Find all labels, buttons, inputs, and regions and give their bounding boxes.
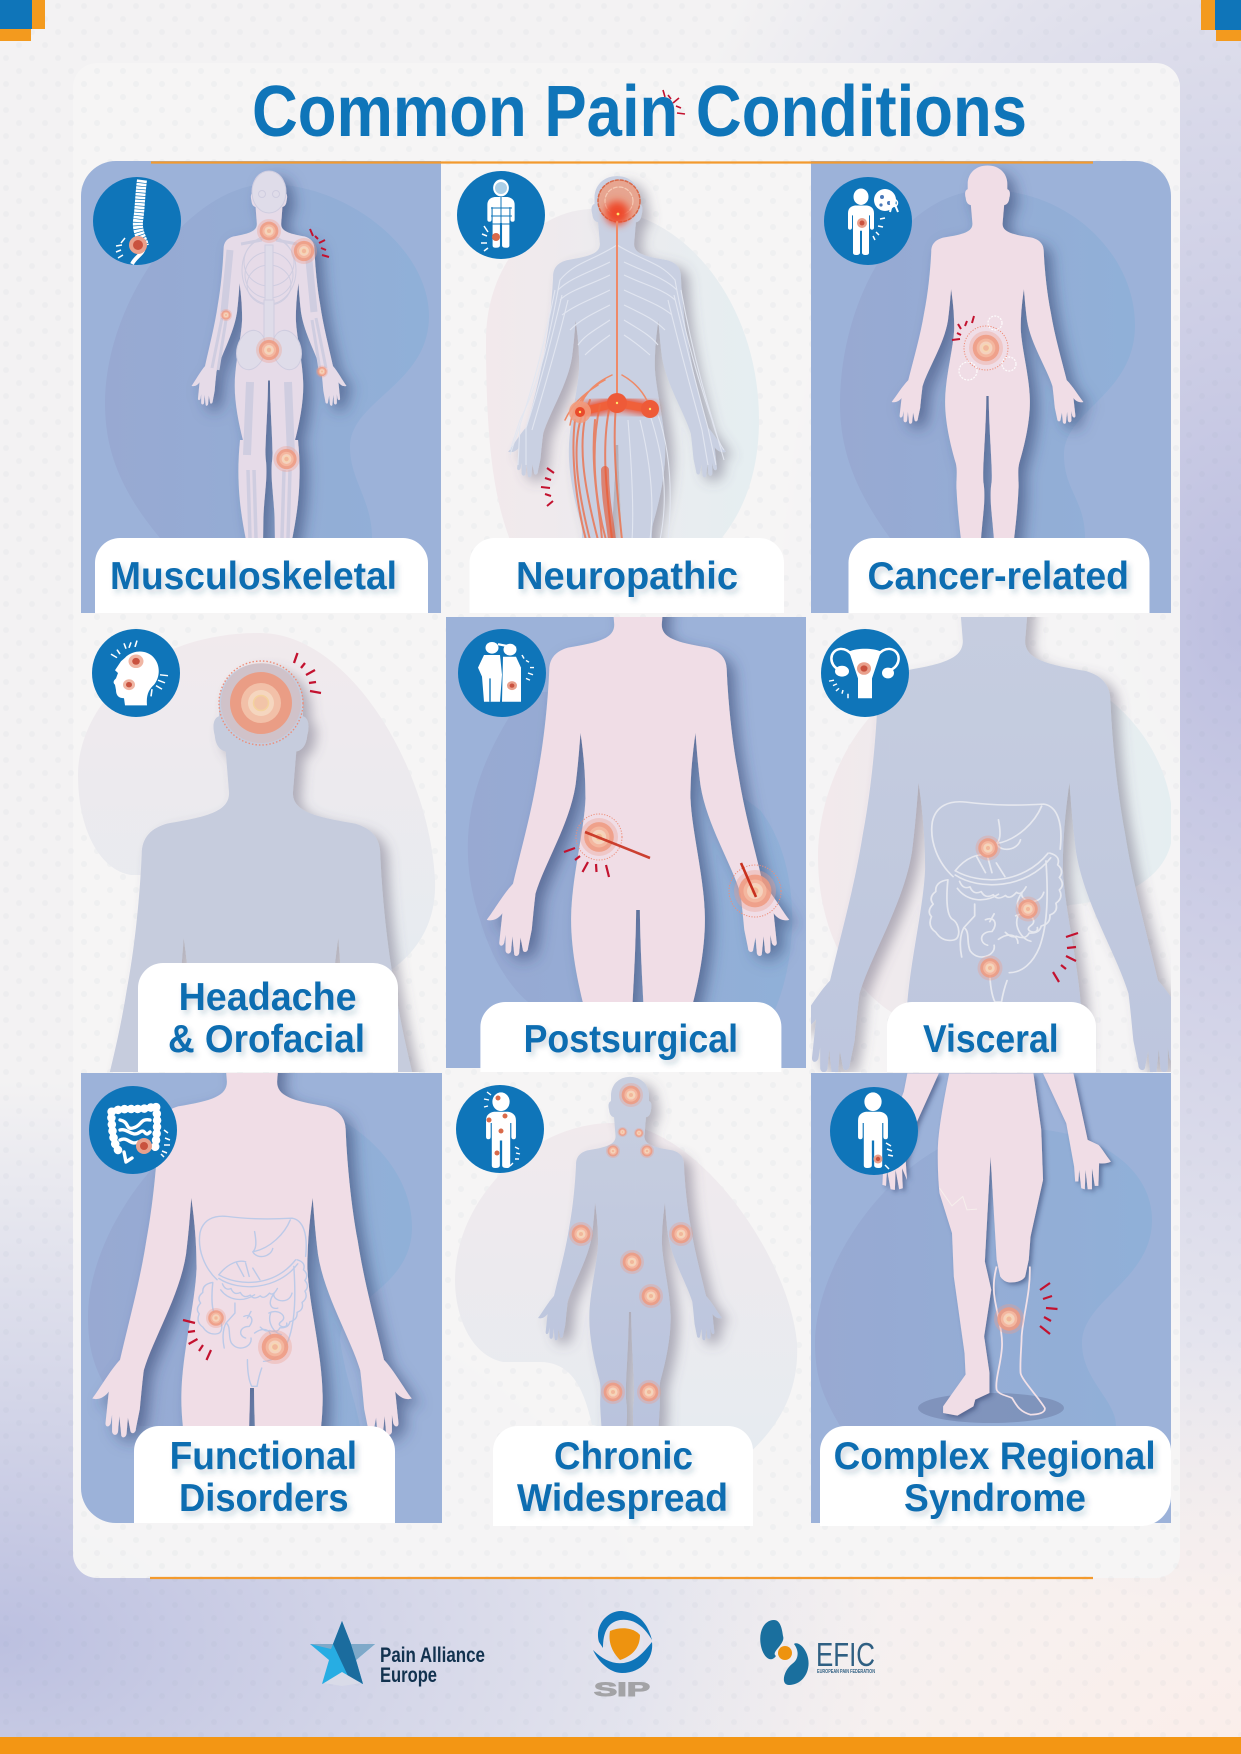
label: Functional Disorders: Functional (170, 1435, 357, 1478)
pain ticks (310, 229, 329, 257)
label: Cancer-related: Cancer-related (868, 555, 1129, 598)
pain marker on head (219, 661, 303, 745)
corner accent top left (0, 0, 45, 41)
icon: person with leg pain (830, 1087, 918, 1175)
main card (73, 63, 1180, 1578)
logo: EFIC: EFIC (816, 1636, 875, 1673)
pain ticks (183, 1320, 211, 1360)
panel: Headache and Orofacial (78, 629, 435, 1072)
label: Complex Regional Syndrome: Syndrome (904, 1477, 1086, 1520)
body with skeleton (192, 171, 346, 560)
corner accent top right (1201, 0, 1241, 41)
panel: Cancer-related (811, 161, 1171, 613)
body silhouette (92, 1073, 423, 1449)
icon: person with cancer cell (824, 177, 912, 265)
icon: nervous system figure (457, 171, 545, 259)
label: Chronic Widespread: Chronic (554, 1435, 693, 1478)
icon: intestines (89, 1086, 177, 1174)
pain markers (569, 1083, 693, 1404)
label: Neuropathic: Neuropathic (516, 555, 738, 598)
label: Chronic Widespread (493, 1426, 753, 1526)
label: Chronic Widespread: Widespread (517, 1477, 728, 1520)
logo: SIP: SIP (594, 1680, 651, 1701)
pain ticks (564, 848, 609, 877)
icon: uterus (821, 629, 909, 717)
pain markers (206, 1308, 292, 1364)
panel: Complex Regional Syndrome (811, 1073, 1171, 1526)
icon: head profile (92, 629, 180, 717)
label: Musculoskeletal: Musculoskeletal (110, 555, 397, 598)
red nerve pathway (565, 180, 650, 540)
label: Complex Regional Syndrome (820, 1426, 1171, 1526)
digestive system outline (929, 802, 1062, 1002)
label: Complex Regional Syndrome: Complex Regional (834, 1435, 1156, 1478)
title: Common Pain Conditions (252, 72, 1027, 152)
pain ticks (541, 468, 554, 506)
pain marker with cells (959, 316, 1016, 380)
label: Neuropathic (470, 538, 784, 613)
icon: person with pain points (456, 1085, 544, 1173)
logo: Pain Alliance Europe (310, 1621, 485, 1687)
panel: Musculoskeletal (81, 161, 441, 613)
body with nervous system (508, 176, 736, 538)
pain ticks (952, 316, 974, 340)
logo: EFIC: EUROPEAN PAIN FEDERATION (817, 1669, 875, 1675)
amputee body (882, 1073, 1111, 1416)
label: Headache and Orofacial (138, 963, 398, 1072)
digestive system outline (197, 1216, 307, 1386)
icon: two people (458, 629, 546, 717)
pain ticks (294, 653, 321, 693)
label: Postsurgical (480, 1002, 781, 1072)
panel: Chronic Widespread (455, 1077, 797, 1526)
body silhouette (811, 617, 1171, 1072)
pain ticks (1053, 933, 1078, 982)
logo: EFIC (760, 1620, 875, 1685)
label: Functional Disorders (134, 1426, 395, 1523)
label: Visceral (887, 1002, 1096, 1072)
panel: Neuropathic (457, 171, 784, 613)
body silhouette (110, 663, 426, 1072)
panel: Postsurgical (446, 617, 806, 1072)
pain ticks (1040, 1283, 1058, 1334)
logo: Pain Alliance Europe: Pain Alliance (380, 1644, 485, 1667)
floor shadow (918, 1393, 1064, 1423)
label: Musculoskeletal (95, 538, 428, 613)
pain markers (220, 219, 328, 472)
body silhouette (486, 617, 800, 1002)
label: Headache and Orofacial: Headache (179, 976, 357, 1019)
label: Headache and Orofacial: & Orofacial (168, 1018, 365, 1061)
label: Cancer-related (848, 538, 1150, 613)
pain markers (976, 836, 1040, 980)
pain markers (569, 213, 659, 423)
body silhouette (892, 166, 1083, 594)
label: Visceral: Visceral (923, 1018, 1059, 1061)
label: Postsurgical: Postsurgical (524, 1018, 738, 1061)
logo: Pain Alliance Europe: Europe (380, 1664, 437, 1687)
label: Functional Disorders: Disorders (179, 1477, 349, 1520)
phantom limb outline (994, 1266, 1045, 1415)
logo: SIP (593, 1611, 652, 1701)
icon: spine (93, 177, 181, 265)
panel: Functional Disorders (81, 1073, 442, 1523)
scar mark (940, 1188, 977, 1210)
surgical scars and pain markers (576, 814, 781, 917)
pain marker (994, 1304, 1024, 1334)
bottom bar (0, 1737, 1241, 1754)
body silhouette (538, 1077, 722, 1514)
panel: Visceral (811, 617, 1171, 1072)
